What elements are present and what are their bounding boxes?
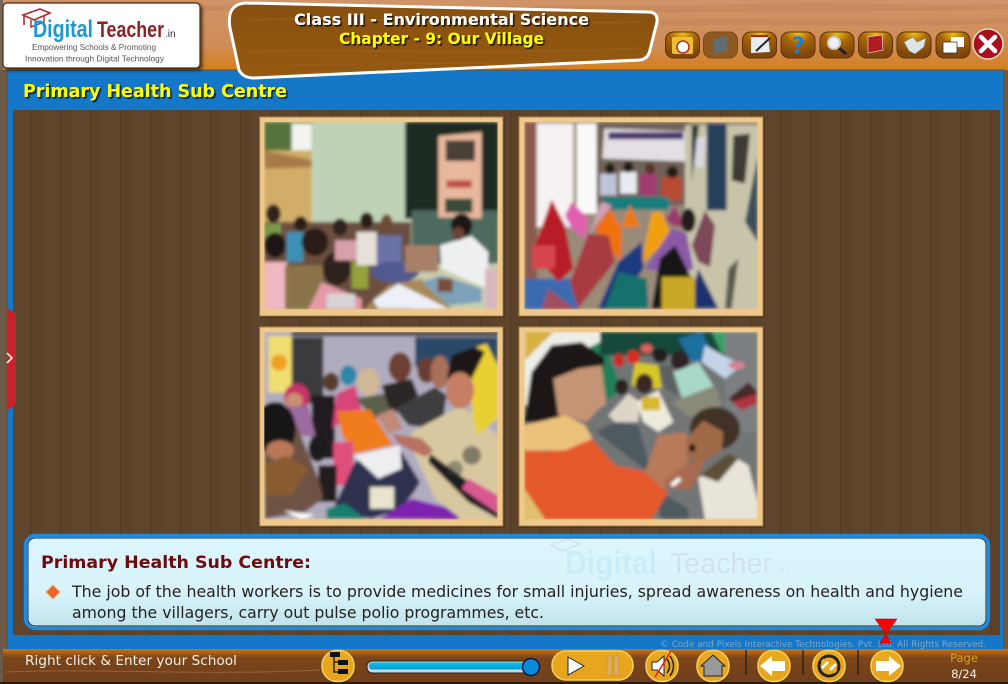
- progress slider: [367, 658, 540, 676]
- callout body text: The job of the health workers is to provide medicines for small injuries, spread awareness on health and hygiene: [71, 582, 963, 601]
- header wood bar: [0, 0, 1008, 70]
- callout body text: [71, 582, 963, 622]
- logo wordmark: .in: [165, 29, 176, 40]
- logo tagline: Innovation through Digital Technology: [25, 54, 165, 64]
- logo tagline: [25, 42, 165, 64]
- icon: graduation cap: [23, 9, 50, 27]
- side panel tab: [7, 308, 16, 411]
- toolbar icons: [666, 29, 1003, 59]
- photo 3: woman giving polio drops to child: [254, 327, 503, 526]
- icon: contents tree: [322, 650, 354, 682]
- bottom control bar: [0, 649, 1008, 684]
- photo 4: health worker with boy: [519, 327, 763, 526]
- red pointer arrow: [875, 619, 897, 643]
- course title: Class III - Environmental Science: [294, 10, 589, 29]
- watermark: Digital: [565, 544, 657, 581]
- watermark: [551, 539, 789, 581]
- chapter title: Chapter - 9: Our Village: [339, 29, 544, 48]
- callout body text: among the villagers, carry out pulse polio programmes, etc.: [72, 603, 544, 622]
- photo 1: health meeting outside building: [260, 117, 503, 316]
- icon: reference book: [704, 32, 738, 58]
- icon: help: [781, 32, 815, 59]
- icon: next arrow: [871, 650, 903, 682]
- icon: magnifier: [820, 32, 854, 58]
- icon: home: [697, 650, 729, 682]
- icon: bullet diamond: [46, 585, 60, 599]
- logo wordmark: Digital: [33, 16, 93, 43]
- icon: timer folder: [666, 32, 700, 58]
- information callout: [26, 536, 988, 628]
- page heading: Primary Health Sub Centre: [23, 81, 287, 102]
- wooden content area: [13, 110, 1000, 635]
- page number: Page: [950, 651, 978, 665]
- logo wordmark: Teacher: [97, 17, 164, 42]
- icon: open book: [897, 32, 931, 58]
- photo 2: women seated at village meeting: [519, 117, 763, 316]
- watermark: .in: [775, 563, 789, 576]
- icon: reload: [813, 650, 845, 682]
- icon: back arrow: [758, 650, 790, 682]
- icon: window resize: [936, 32, 970, 58]
- icon: dictionary: [858, 32, 892, 58]
- play pause control: [552, 651, 633, 680]
- icon: sound muted: [646, 650, 678, 682]
- icon: notepad: [742, 32, 776, 58]
- title plaque: [229, 3, 657, 78]
- logo panel: [3, 3, 200, 68]
- copyright line: © Code and Pixels Interactive Technologies. Pvt. Ltd. All Rights Reserved.: [660, 640, 986, 650]
- icon: close: [973, 29, 1003, 59]
- watermark: Teacher: [670, 548, 772, 580]
- school prompt: Right click & Enter your School: [25, 654, 237, 669]
- page number: 8/24: [951, 667, 977, 681]
- callout heading: Primary Health Sub Centre:: [41, 553, 311, 573]
- icon: help: ?: [792, 34, 804, 59]
- page number: [950, 651, 978, 681]
- logo tagline: Empowering Schools & Promoting: [32, 42, 156, 52]
